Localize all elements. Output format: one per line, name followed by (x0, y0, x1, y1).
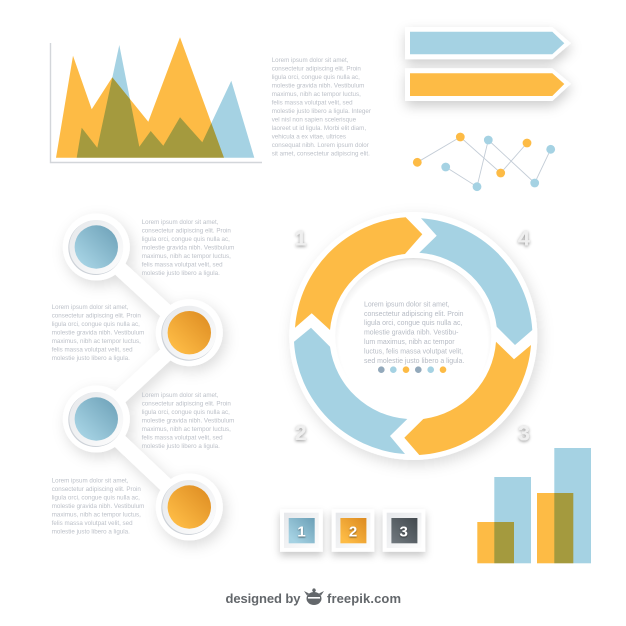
timeline node 2: orange (161, 306, 216, 361)
orange arrow banner (405, 68, 571, 101)
numbered square 3 (383, 509, 425, 552)
timeline text 4: consectetur adipiscing elit. Proin (52, 486, 141, 493)
numbered square 1: 1 (297, 523, 306, 540)
timeline text 2: Lorem ipsum dolor sit amet, (52, 304, 129, 311)
cycle diagram (289, 212, 537, 460)
timeline text 1: Lorem ipsum dolor sit amet, (142, 219, 219, 226)
timeline text 3: felis massa volutpat velit, sed (142, 435, 223, 442)
timeline text 1: maximus, nibh ac tempor luctus, (142, 253, 231, 260)
cycle number 1: 1 (295, 228, 307, 250)
timeline text 3: Lorem ipsum dolor sit amet, (142, 392, 219, 399)
timeline text 2: felis massa volutpat velit, sed (52, 346, 133, 353)
cycle number 3: 3 (518, 422, 530, 446)
timeline node 1: blue (68, 220, 123, 275)
numbered square 1 (280, 509, 323, 552)
timeline text 1: molestie gravida nibh. Vestibulum (142, 244, 234, 251)
icon: freepik logo (304, 588, 324, 605)
bar: orange 1 (477, 522, 514, 563)
cycle centre dots (378, 366, 446, 373)
cycle number 2: 2 (295, 422, 307, 445)
area chart (50, 37, 262, 162)
timeline text 2: consectetur adipiscing elit. Proin (52, 312, 141, 319)
timeline: connected circles (63, 214, 223, 540)
bar: blue 1 (494, 477, 531, 563)
cycle centre text: luctus, felis massa volutpat velit, (364, 348, 463, 355)
timeline text 1: molestie justo libero a ligula. (142, 270, 220, 277)
text block: chart description: consequat nibh. Lorem ipsum dolor (272, 142, 369, 149)
footer credit: freepik.com (327, 591, 401, 606)
timeline text 3: molestie gravida nibh. Vestibulum (142, 418, 234, 425)
cycle centre text: ligula orci, congue quis nulla ac, (364, 320, 462, 327)
bar chart (477, 448, 591, 563)
timeline text 2: ligula orci, congue quis nulla ac, (52, 321, 140, 328)
timeline text 3: ligula orci, congue quis nulla ac, (142, 409, 230, 416)
cycle white ring base (289, 212, 537, 460)
text block: chart description: molestie gravida nibh. Vestibulum (272, 83, 364, 90)
cycle number 4: 4 (518, 228, 530, 250)
network line chart (413, 133, 555, 191)
timeline node 4: orange (161, 480, 216, 535)
text block: chart description: laoreet ut id ligula. Morbi elit diam, (272, 125, 366, 132)
footer credit: designed by (226, 591, 301, 606)
timeline text 4: felis massa volutpat velit, sed (52, 520, 133, 527)
timeline text 4: molestie gravida nibh. Vestibulum (52, 503, 144, 510)
timeline text 4: maximus, nibh ac tempor luctus, (52, 512, 141, 518)
timeline text 4: molestie justo libero a ligula. (52, 528, 130, 536)
blue area series (77, 45, 254, 158)
timeline text 3: molestie justo libero a ligula. (142, 443, 220, 450)
numbered square 2 (332, 509, 374, 552)
cycle centre text: consectetur adipiscing elit. Proin (364, 311, 464, 318)
timeline text 4: Lorem ipsum dolor sit amet, (52, 478, 129, 484)
cycle centre text: lum maximus, nibh ac tempor (364, 339, 455, 346)
cycle segment 1: orange arrow (295, 217, 422, 330)
text block: chart description: consectetur adipiscing elit. Proin (272, 66, 361, 73)
numbered square 3: 3 (400, 523, 408, 540)
text block: chart description: vehicula a ex vitae, ultrices (272, 134, 346, 141)
cycle segment 2: blue arrow (294, 328, 407, 454)
timeline node 3: blue (68, 392, 123, 447)
numbered square 2: 2 (349, 523, 357, 540)
cycle centre text: sed molestie justo libero a ligula. (364, 358, 464, 365)
timeline text 3: consectetur adipiscing elit. Proin (142, 401, 231, 408)
timeline connectors (63, 214, 223, 540)
bar: blue 2 (554, 448, 591, 563)
cycle centre text: Lorem ipsum dolor sit amet, (364, 301, 450, 308)
timeline text 1: consectetur adipiscing elit. Proin (142, 227, 231, 234)
timeline text 1: ligula orci, congue quis nulla ac, (142, 236, 230, 243)
timeline text 2: molestie justo libero a ligula. (52, 355, 130, 362)
footer credit (226, 588, 401, 606)
timeline text 3: maximus, nibh ac tempor luctus, (142, 426, 231, 433)
text block: chart description: felis massa volutpat velit, sed (272, 100, 353, 107)
text block: chart description: Lorem ipsum dolor sit amet, (272, 57, 349, 64)
timeline text 2: maximus, nibh ac tempor luctus, (52, 338, 141, 345)
timeline text 4: ligula orci, congue quis nulla ac, (52, 494, 140, 502)
bar: orange 2 (537, 493, 573, 563)
cycle segment 4: blue arrow (419, 218, 532, 345)
timeline text 2: molestie gravida nibh. Vestibulum (52, 329, 144, 336)
text block: chart description: ligula orci, congue quis nulla ac, (272, 74, 360, 81)
cycle centre text: molestie gravida nibh. Vestibu- (364, 330, 458, 337)
text block: chart description: vel nisl non sapien scelerisque (272, 117, 357, 124)
cycle centre hole (335, 258, 491, 414)
text block: chart description: maximus, nibh ac tempor luctus, (272, 91, 361, 98)
text block: chart description: sit amet, consectetur adipiscing elit. (272, 151, 370, 158)
orange area series (56, 37, 224, 158)
text block: chart description: molestie justo libero a ligula. Integer (272, 108, 371, 115)
chart axes (50, 43, 262, 162)
blue arrow banner (405, 27, 571, 59)
cycle segment 3: orange arrow (404, 342, 531, 455)
timeline text 1: felis massa volutpat velit, sed (142, 261, 223, 268)
